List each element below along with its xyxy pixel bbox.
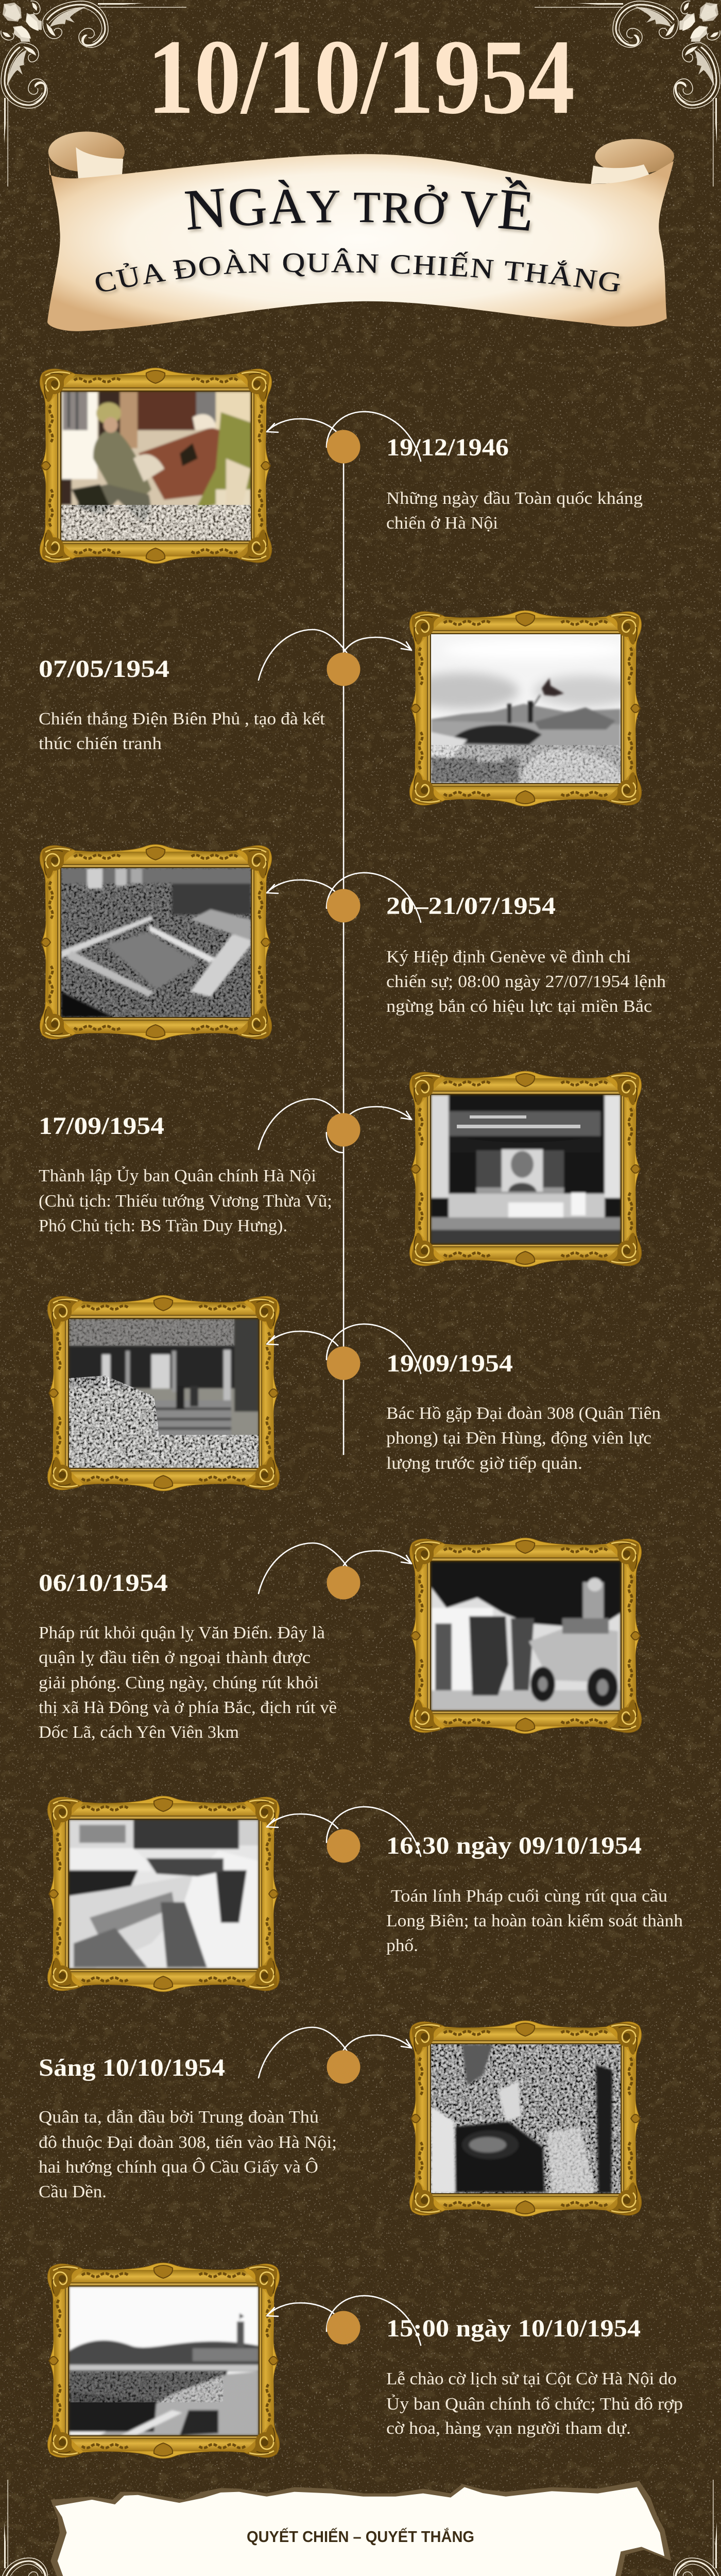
event 5: 19/09/1954	[47, 1295, 661, 1491]
connector arrows	[259, 2027, 411, 2078]
event 3: 20–21/07/1954	[40, 844, 666, 1040]
timeline dot	[327, 1113, 360, 1147]
timeline dot	[327, 1566, 360, 1599]
scroll heading line 1: NGÀY TRỞ VỀ	[184, 177, 534, 234]
description	[386, 2369, 683, 2438]
description: thị xã Hà Đông và ở phía Bắc, địch rút về	[39, 1698, 337, 1717]
description: phong) tại Đền Hùng, động viên lực	[386, 1429, 651, 1448]
slogan: QUYẾT CHIẾN – QUYẾT THẮNG	[247, 2527, 474, 2546]
connector arrows	[267, 1324, 421, 1374]
torn paper shape	[50, 2481, 672, 2576]
description: lượng trước giờ tiếp quản.	[386, 1454, 582, 1473]
framed photo: flag tower ceremony	[47, 2263, 280, 2459]
description: quận lỵ đầu tiên ở ngoại thành được	[39, 1648, 311, 1667]
scroll parchment shape	[47, 131, 674, 331]
description: Thành lập Ủy ban Quân chính Hà Nội	[39, 1166, 316, 1185]
description: Dốc Lã, cách Yên Viên 3km	[39, 1723, 239, 1742]
framed photo: soldier in rubble	[40, 368, 272, 564]
timeline dot	[327, 2050, 360, 2083]
event 7: 16:30 ngày 09/10/1954	[47, 1796, 683, 1992]
connector arrows	[259, 1543, 411, 1594]
timeline dot	[327, 889, 360, 922]
event 9: 15:00 ngày 10/10/1954	[47, 2263, 683, 2459]
description: đô thuộc Đại đoàn 308, tiến vào Hà Nội;	[39, 2133, 337, 2152]
connector arrows	[267, 1807, 421, 1856]
date: 16:30 ngày 09/10/1954	[386, 1832, 642, 1859]
scroll heading line 2: CỦA ĐOÀN QUÂN CHIẾN THẮNG	[96, 248, 622, 295]
description: Long Biên; ta hoàn toàn kiểm soát thành	[386, 1911, 683, 1930]
description: hai hướng chính qua Ô Cầu Giấy và Ô	[39, 2157, 318, 2177]
timeline dot	[327, 1347, 360, 1380]
event 1: 19/12/1946	[40, 368, 643, 564]
date: 07/05/1954	[39, 655, 169, 683]
connector arrows	[267, 873, 421, 922]
connector arrows	[259, 630, 411, 680]
description: (Chủ tịch: Thiếu tướng Vương Thừa Vũ;	[39, 1192, 332, 1211]
description: thúc chiến tranh	[39, 734, 162, 753]
date: 06/10/1954	[39, 1569, 168, 1597]
description: Ủy ban Quân chính tổ chức; Thủ đô rợp	[386, 2395, 683, 2414]
description: ngừng bắn có hiệu lực tại miền Bắc	[386, 997, 652, 1016]
description: phố.	[386, 1936, 418, 1955]
date: 19/12/1946	[386, 434, 509, 461]
description: giải phóng. Cùng ngày, chúng rút khỏi	[39, 1673, 319, 1692]
description: Quân ta, dẫn đầu bởi Trung đoàn Thủ	[39, 2108, 319, 2127]
date: 19/09/1954	[386, 1350, 513, 1377]
description	[386, 947, 666, 1016]
description	[39, 709, 325, 753]
date: 17/09/1954	[39, 1112, 164, 1140]
parchment scroll banner	[47, 131, 674, 331]
framed photo: Geneva conference	[40, 844, 272, 1040]
connector arrows	[267, 2296, 421, 2345]
description: Cầu Dền.	[39, 2182, 107, 2201]
description	[39, 2108, 337, 2201]
framed photo: French troops crossing	[47, 1796, 280, 1992]
corner ornament: top right	[535, 1, 720, 187]
framed photo: flag over bunker	[405, 611, 642, 806]
event 8: Sáng 10/10/1954	[39, 2021, 642, 2216]
description	[386, 489, 643, 533]
corner ornament: bottom right	[535, 2480, 720, 2576]
description: Lễ chào cờ lịch sử tại Cột Cờ Hà Nội do	[386, 2369, 677, 2388]
timeline vertical line	[343, 463, 344, 1455]
timeline dot	[327, 2311, 360, 2344]
torn paper closing banner	[50, 2481, 672, 2576]
title date: 10/10/1954	[147, 18, 575, 136]
timeline dot	[327, 430, 360, 464]
description: Bác Hồ gặp Đại đoàn 308 (Quân Tiên	[386, 1404, 661, 1423]
framed photo: stage with portrait	[409, 1071, 642, 1267]
description: Toán lính Pháp cuối cùng rút qua cầu	[391, 1887, 667, 1906]
description: Pháp rút khỏi quận lỵ Văn Điển. Đây là	[39, 1623, 325, 1642]
event 2: 07/05/1954	[39, 611, 642, 806]
event 6: 06/10/1954	[39, 1538, 642, 1742]
framed photo: armored vehicle withdrawal	[409, 1538, 642, 1734]
corner ornament: bottom left	[1, 2480, 186, 2576]
description: Ký Hiệp định Genève về đình chỉ	[386, 947, 631, 967]
description: cờ hoa, hàng vạn người tham dự.	[386, 2419, 631, 2438]
date: 20–21/07/1954	[386, 892, 556, 920]
description: Phó Chủ tịch: BS Trần Duy Hưng).	[39, 1216, 287, 1235]
event 4: 17/09/1954	[39, 1071, 642, 1267]
description	[39, 1166, 332, 1235]
connector arrows	[259, 1099, 411, 1153]
connector arrows	[267, 412, 421, 461]
description	[386, 1404, 661, 1473]
timeline dot	[327, 652, 360, 686]
description: chiến sự; 08:00 ngày 27/07/1954 lệnh	[386, 972, 666, 991]
description	[39, 1623, 337, 1742]
description: Những ngày đầu Toàn quốc kháng	[386, 489, 643, 508]
description: Chiến thắng Điện Biên Phủ , tạo đà kết	[39, 709, 325, 728]
framed photo: temple gathering	[47, 1295, 280, 1491]
corner ornament: top left	[1, 1, 186, 187]
description: chiến ở Hà Nội	[386, 514, 498, 533]
timeline dot	[327, 1829, 360, 1863]
description	[386, 1887, 683, 1955]
date: 15:00 ngày 10/10/1954	[386, 2315, 641, 2342]
date: Sáng 10/10/1954	[39, 2054, 225, 2081]
framed photo: crowd welcoming troops	[409, 2021, 642, 2216]
